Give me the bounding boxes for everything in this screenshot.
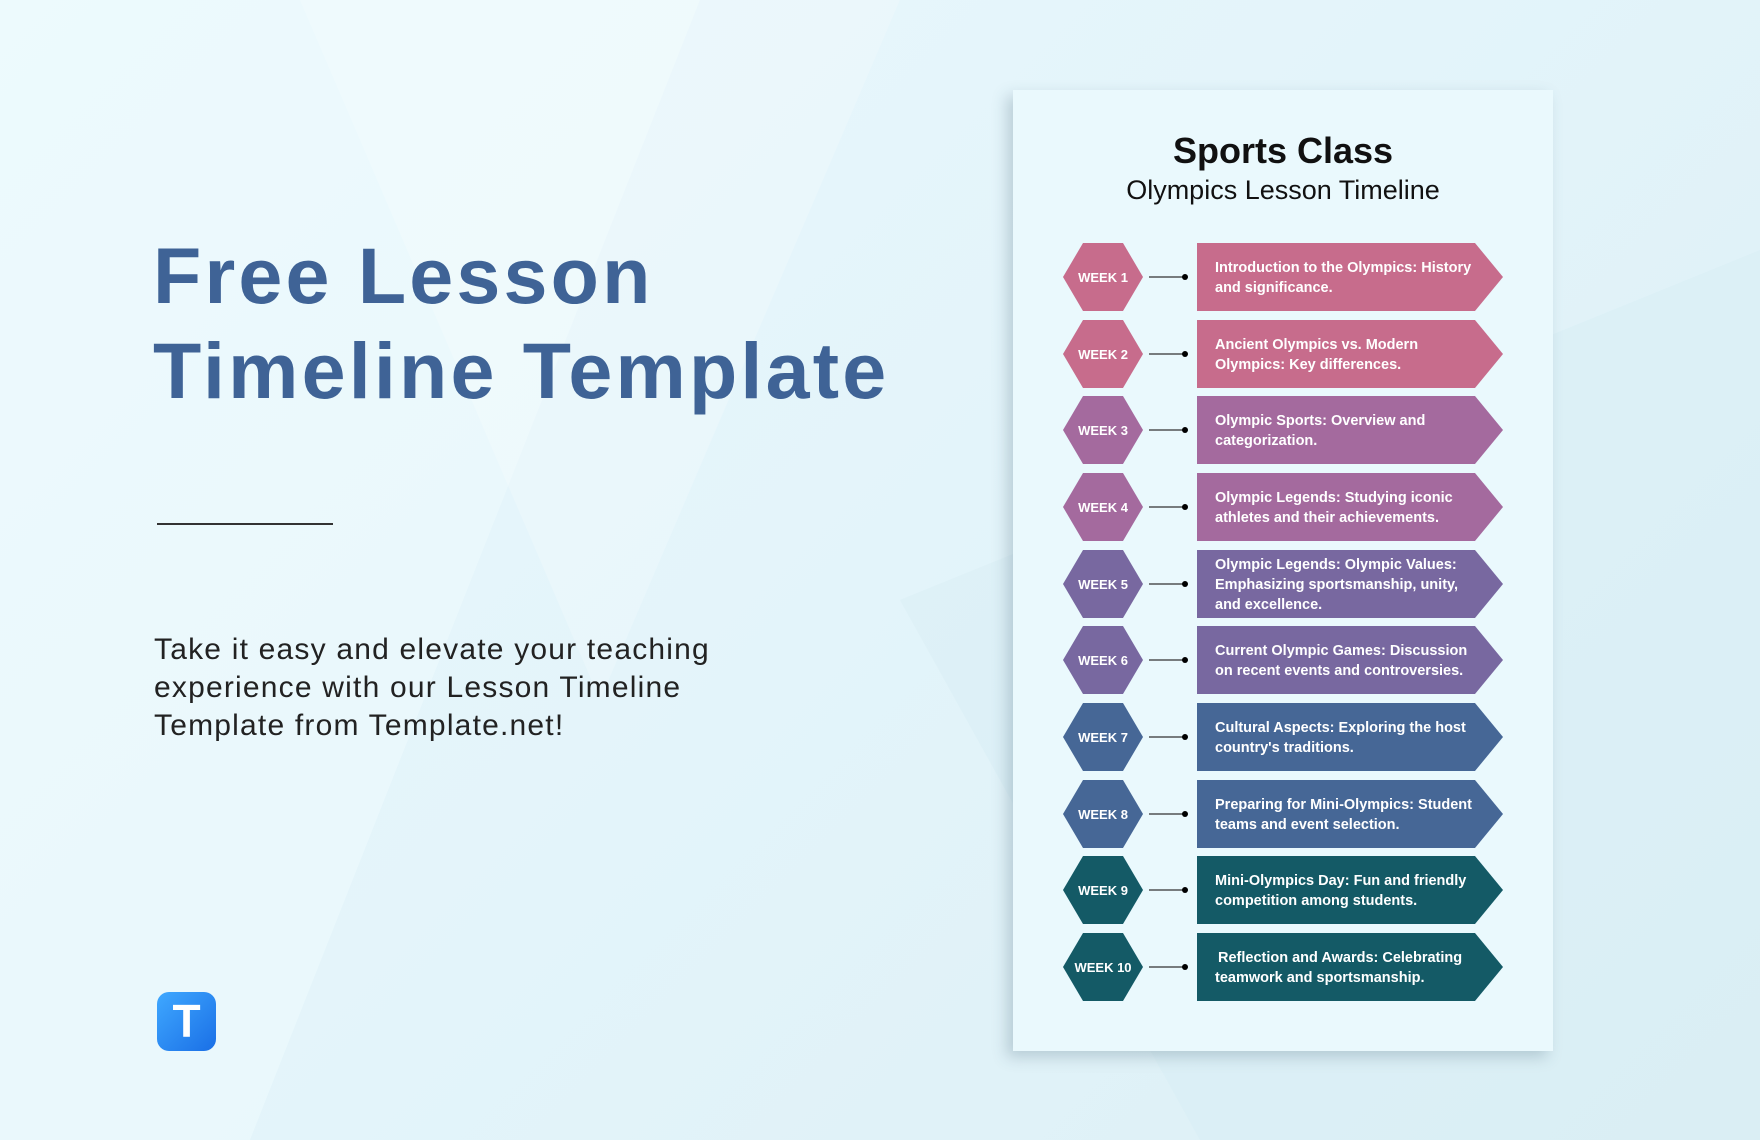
row: week 9: Mini-Olympics Day: Fun and friendly [1215, 873, 1466, 889]
row: week 3 [1063, 396, 1503, 464]
row: week 5: Emphasizing sportsmanship, unity, [1215, 577, 1458, 593]
row: week 1: Introduction to the Olympics: History [1215, 260, 1471, 276]
row: week 7: country's traditions. [1215, 740, 1354, 756]
row: week 3: categorization. [1215, 433, 1317, 449]
row: week 8 [1063, 780, 1503, 848]
logo [157, 992, 216, 1051]
row: week 10: Reflection and Awards: Celebrating [1218, 950, 1462, 966]
title [153, 231, 889, 415]
row: week 2: Olympics: Key differences. [1215, 357, 1401, 373]
description: Take it easy and elevate your teaching experience with our Lesson Timeline Template from Template.net! [154, 633, 710, 742]
row: week 10 [1063, 933, 1503, 1001]
row: week 8: Preparing for Mini-Olympics: Student [1215, 797, 1472, 813]
row: week 1: and significance. [1215, 280, 1333, 296]
divider line [157, 523, 333, 524]
row: week 5: Olympic Legends: Olympic Values: [1215, 557, 1457, 573]
row: week 4 [1063, 473, 1503, 541]
card subtitle: Olympics Lesson Timeline [1126, 175, 1440, 205]
row: week 4: WEEK 4 [1078, 500, 1129, 515]
row: week 5 [1063, 550, 1503, 618]
row: week 2: Ancient Olympics vs. Modern [1215, 337, 1418, 353]
row: week 6: on recent events and controversies. [1215, 663, 1463, 679]
row: week 9: competition among students. [1215, 893, 1417, 909]
row: week 8: teams and event selection. [1215, 817, 1400, 833]
row: week 10: teamwork and sportsmanship. [1215, 970, 1424, 986]
row: week 5: and excellence. [1215, 597, 1322, 613]
row: week 9 [1063, 856, 1503, 924]
row: week 4: athletes and their achievements. [1215, 510, 1439, 526]
row: week 4: Olympic Legends: Studying iconic [1215, 490, 1453, 506]
row: week 5: WEEK 5 [1078, 577, 1128, 592]
row: week 6 [1063, 626, 1503, 694]
row: week 10: WEEK 10 [1074, 960, 1132, 975]
row: week 7 [1063, 703, 1503, 771]
row: week 9: WEEK 9 [1078, 883, 1128, 898]
title: Free Lesson [153, 231, 654, 320]
row: week 7: WEEK 7 [1078, 730, 1128, 745]
row: week 1: WEEK 1 [1078, 270, 1128, 285]
row: week 3: Olympic Sports: Overview and [1215, 413, 1425, 429]
row: week 6: Current Olympic Games: Discussion [1215, 643, 1467, 659]
panel: timeline card [1013, 90, 1553, 1051]
row: week 2: WEEK 2 [1078, 347, 1128, 362]
row: week 6: WEEK 6 [1078, 653, 1128, 668]
title: Timeline Template [153, 326, 889, 415]
card title: Sports Class [1173, 130, 1393, 171]
row: week 7: Cultural Aspects: Exploring the host [1215, 720, 1466, 736]
row: week 2 [1063, 320, 1503, 388]
row: week 8: WEEK 8 [1078, 807, 1128, 822]
logo: T [172, 995, 201, 1047]
row: week 3: WEEK 3 [1078, 423, 1128, 438]
row: week 1 [1063, 243, 1503, 311]
